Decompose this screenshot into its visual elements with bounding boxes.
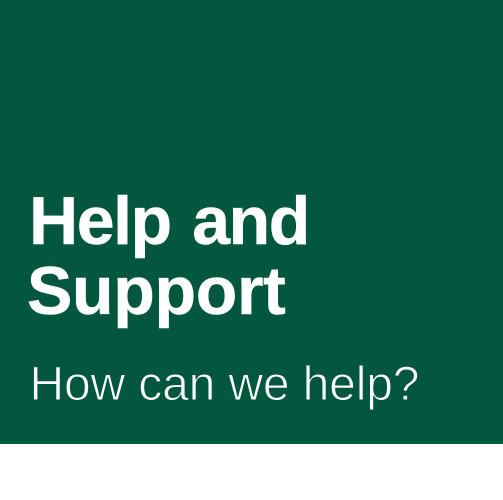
subtitle: How can we help? <box>30 358 419 411</box>
title <box>27 183 309 329</box>
title: Help and <box>29 183 309 259</box>
title: Support <box>27 253 286 329</box>
